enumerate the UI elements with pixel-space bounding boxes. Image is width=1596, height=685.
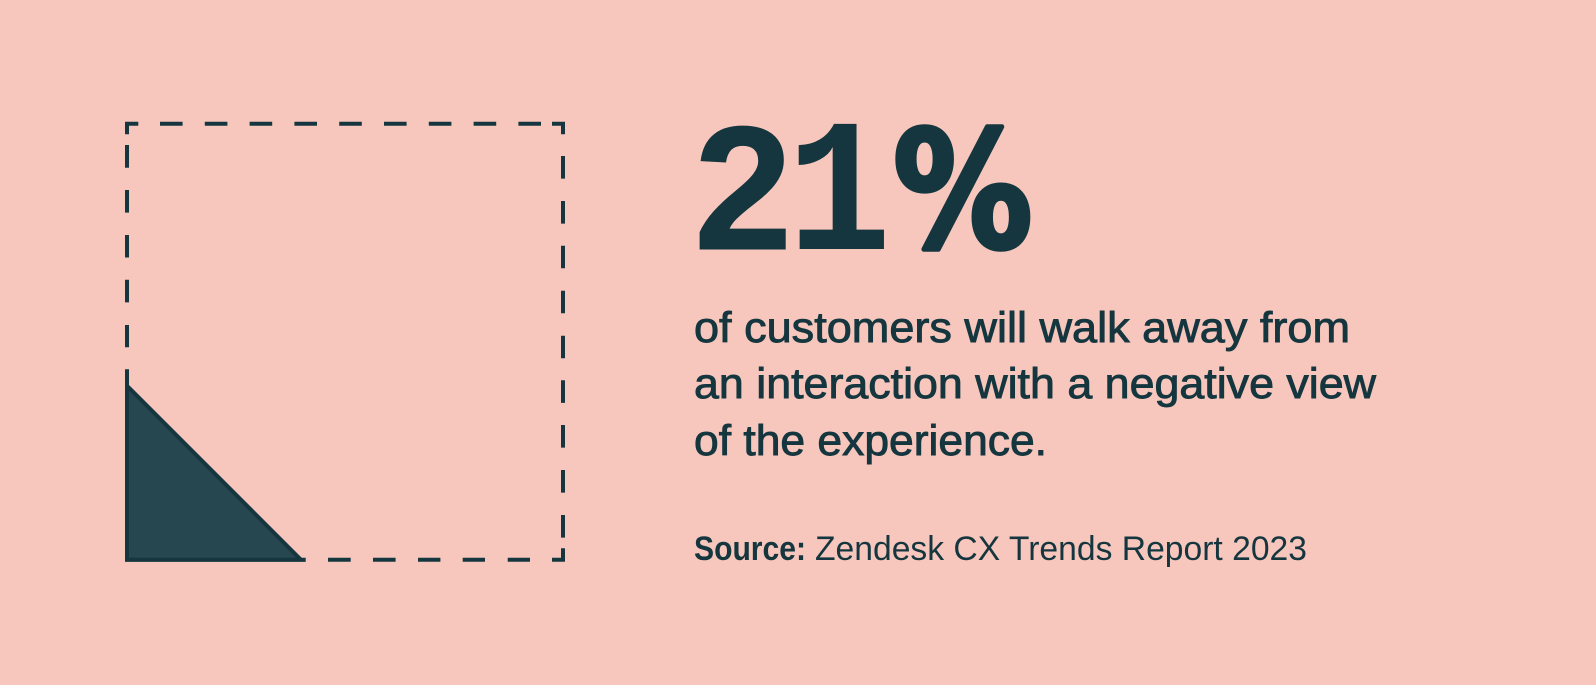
description text: an interaction with a negative view: [694, 360, 1377, 408]
description text: [694, 304, 1377, 465]
big statistic: 21%: %: [893, 97, 1033, 286]
source line: Zendesk CX Trends Report 2023: [815, 530, 1307, 568]
description text: of the experience.: [694, 417, 1047, 465]
big statistic: 21%: 1: [787, 90, 891, 306]
source line: Source:: [694, 530, 806, 568]
filled triangle representing 21%: [127, 386, 301, 560]
description text: of customers will walk away from: [694, 304, 1350, 352]
chart: dashed square with filled corner triangle: [127, 124, 563, 560]
big statistic: 21%: [694, 90, 1033, 306]
big statistic: 21%: 2: [694, 90, 792, 287]
dashed square outline: [127, 124, 563, 560]
